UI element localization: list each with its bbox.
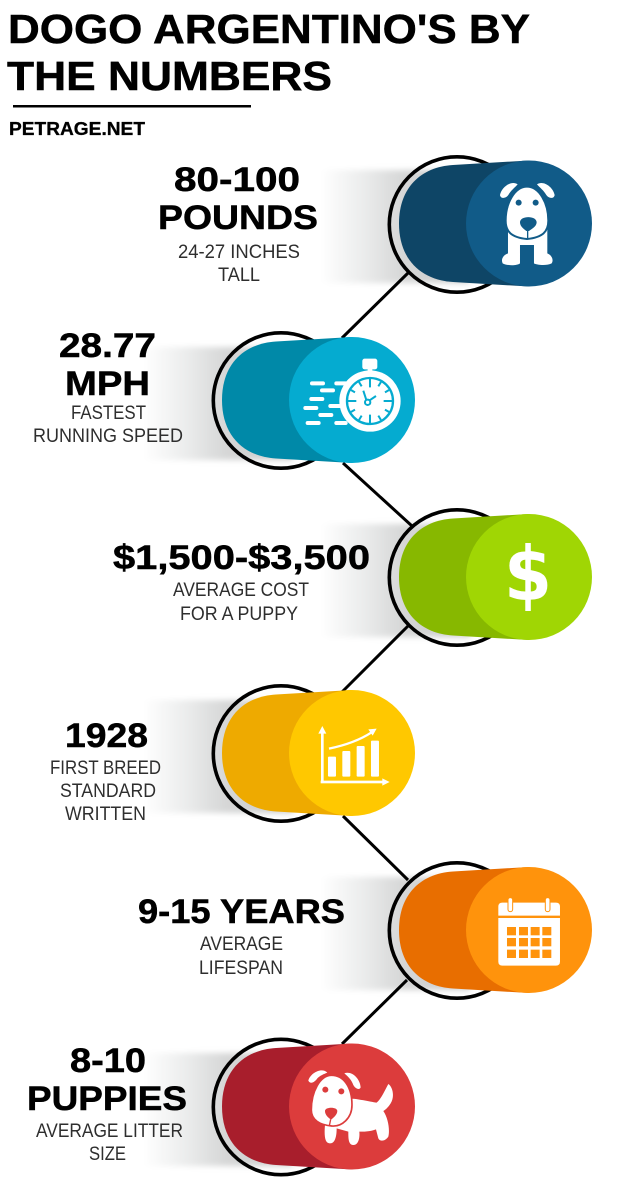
icon: stopwatch: [303, 359, 401, 432]
stat text: LIFESPAN: [199, 958, 283, 979]
stat text: POUNDS: [158, 199, 318, 237]
front circle: [289, 690, 415, 816]
stat text: AVERAGE LITTER: [36, 1121, 183, 1142]
dark pill: [222, 690, 352, 816]
front circle: [466, 160, 592, 286]
stat text: 9-15 YEARS: [138, 893, 345, 931]
stat text: 24-27 INCHES: [178, 242, 300, 263]
stat text: [113, 539, 370, 625]
ring: [213, 333, 349, 468]
dark pill: [222, 1044, 352, 1170]
stat text: [138, 893, 345, 979]
stat text: STANDARD: [60, 781, 156, 802]
dark pill: [222, 337, 352, 463]
icon: growth chart: [318, 726, 390, 786]
title underline: [13, 105, 251, 108]
front circle: [466, 514, 592, 640]
stat text: [27, 1042, 187, 1165]
panel: speed: [33, 327, 415, 468]
front circle: [289, 1044, 415, 1170]
soft shadows behind the circles: [143, 170, 470, 1166]
stat text: TALL: [218, 265, 260, 286]
front circle: [289, 337, 415, 463]
ring: [389, 157, 525, 292]
stat text: 8-10: [70, 1042, 146, 1080]
connector lines: [342, 273, 412, 1044]
stat text: [33, 327, 183, 447]
title: DOGO ARGENTINO'S BY: [8, 6, 530, 52]
source label: PETRAGE.NET: [9, 119, 145, 139]
stat text: FOR A PUPPY: [180, 604, 298, 625]
icon: calendar: [498, 898, 560, 966]
stat text: WRITTEN: [65, 804, 146, 825]
stat text: FASTEST: [71, 403, 146, 424]
stat text: AVERAGE: [200, 934, 283, 955]
stat text: RUNNING SPEED: [33, 426, 183, 447]
stat text: 80-100: [174, 161, 300, 199]
ring: [213, 686, 349, 821]
stat text: [50, 717, 161, 825]
stat text: 28.77: [59, 327, 156, 365]
icon: dollar sign: $: [504, 530, 552, 618]
stat text: 1928: [65, 717, 148, 755]
dark pill: [399, 867, 529, 993]
panel: breed standard: [50, 686, 415, 825]
stat text: PUPPIES: [27, 1080, 187, 1118]
panel: litter size: [27, 1039, 415, 1175]
stat text: $1,500-$3,500: [113, 539, 370, 577]
icon: puppy side: [308, 1070, 393, 1145]
stat text: SIZE: [89, 1144, 126, 1165]
ring: [213, 1039, 349, 1175]
ring: [389, 510, 525, 645]
stat text: AVERAGE COST: [173, 580, 309, 601]
icon: dog front: [500, 183, 555, 265]
dark pill: [399, 160, 529, 286]
ring: [389, 863, 525, 998]
dark pill: [399, 514, 529, 640]
title: [7, 6, 530, 99]
title: THE NUMBERS: [7, 53, 332, 99]
panel: weight: [158, 157, 592, 292]
stat text: [158, 161, 318, 286]
stat text: FIRST BREED: [50, 758, 161, 779]
stat text: MPH: [65, 365, 150, 403]
panel: cost: [113, 510, 592, 645]
panel: lifespan: [138, 863, 592, 998]
front circle: [466, 867, 592, 993]
